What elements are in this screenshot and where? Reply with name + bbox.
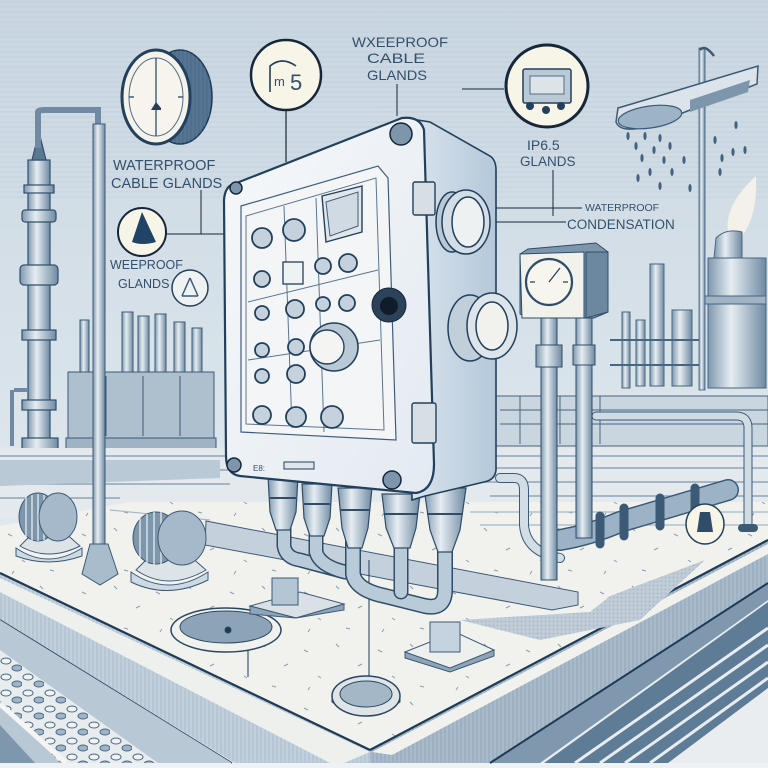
shadow hatching (460, 560, 705, 640)
main dial (310, 323, 358, 371)
badge: enclosure IP65 (506, 45, 588, 127)
right foreground pipe loop (500, 416, 754, 558)
background tanks (66, 312, 216, 452)
leader: IP badge to enclosure (285, 110, 287, 162)
cable glands (268, 476, 466, 552)
platform left face (0, 573, 370, 763)
label: waterproof cable glands top (352, 34, 448, 83)
enclosure (224, 118, 517, 500)
left drum gauge one (16, 493, 82, 562)
enclosure side wall (405, 118, 496, 500)
ground behind platform (0, 448, 768, 518)
tall left pole (82, 124, 118, 585)
leader lines: right labels (494, 170, 582, 222)
label: condensation (567, 202, 675, 232)
drain ring bottom (332, 676, 400, 716)
badge: water drop (118, 208, 166, 256)
display screen (322, 186, 362, 242)
hinges (412, 182, 436, 443)
shadow on platform (460, 560, 705, 640)
label: IP65 glands (520, 137, 576, 169)
enclosure label plate: E8: (253, 464, 265, 473)
label: condensation: WATERPROOF (585, 202, 659, 214)
label: waterproof cable glands left: WATERPROOF (113, 158, 215, 174)
black gland (372, 288, 406, 322)
small drain ring left (171, 608, 281, 652)
badge: IP 65: 5 (290, 70, 302, 95)
base block left (250, 578, 344, 618)
label: waterproof cable glands top: CABLE (367, 50, 425, 66)
small round badge right (686, 504, 724, 544)
side gauge upper (436, 190, 490, 254)
platform surface (0, 502, 768, 750)
rail bed bottom right (490, 583, 768, 763)
badge: IP 65 (251, 40, 321, 110)
small indicator square (283, 262, 303, 284)
shower head and rain (616, 48, 758, 390)
label: waterproof cable glands top: GLANDS (367, 67, 427, 83)
control grid (246, 178, 384, 432)
cable trough (205, 521, 578, 610)
platform back lines (110, 510, 768, 525)
label: waterproof cable glands left (111, 158, 222, 192)
badge: gland icon (172, 270, 208, 306)
corner screws (227, 123, 412, 489)
sky hatching (0, 0, 768, 200)
refinery background right (496, 176, 768, 446)
control knobs (252, 219, 357, 428)
gravel bed bottom left (0, 620, 232, 763)
left drum gauge two (131, 511, 208, 591)
cable conduits under enclosure (284, 520, 445, 607)
right vertical pipes with gauge box (520, 243, 608, 580)
leader: top label to enclosure (396, 84, 398, 116)
base block right (405, 622, 494, 672)
gauge: top left (122, 50, 212, 144)
background distillation tower (12, 110, 98, 450)
platform right face (370, 540, 768, 763)
label: waterproof glands left: GLANDS (118, 277, 169, 291)
label: IP65 glands: GLANDS (520, 154, 576, 169)
leader arrow: to enclosure badge (462, 88, 504, 90)
platform specks (0, 502, 768, 750)
label: waterproof cable glands left: CABLE GLANDS (111, 176, 222, 192)
label: waterproof cable glands top: WXEEPROOF (352, 34, 448, 50)
enclosure inner bezel (241, 166, 396, 440)
side gauge lower (448, 293, 517, 361)
label: waterproof glands left: WEEPROOF (110, 258, 183, 272)
label: condensation: CONDENSATION (567, 217, 675, 232)
enclosure label plate (253, 462, 314, 473)
label: waterproof glands left (110, 258, 183, 291)
badge: IP 65: m (274, 74, 285, 89)
leader: water drop to enclosure (166, 190, 258, 234)
label: IP65 glands: IP6.5 (527, 137, 560, 153)
enclosure front panel (224, 118, 434, 493)
leader: conduit to drain (248, 560, 369, 677)
